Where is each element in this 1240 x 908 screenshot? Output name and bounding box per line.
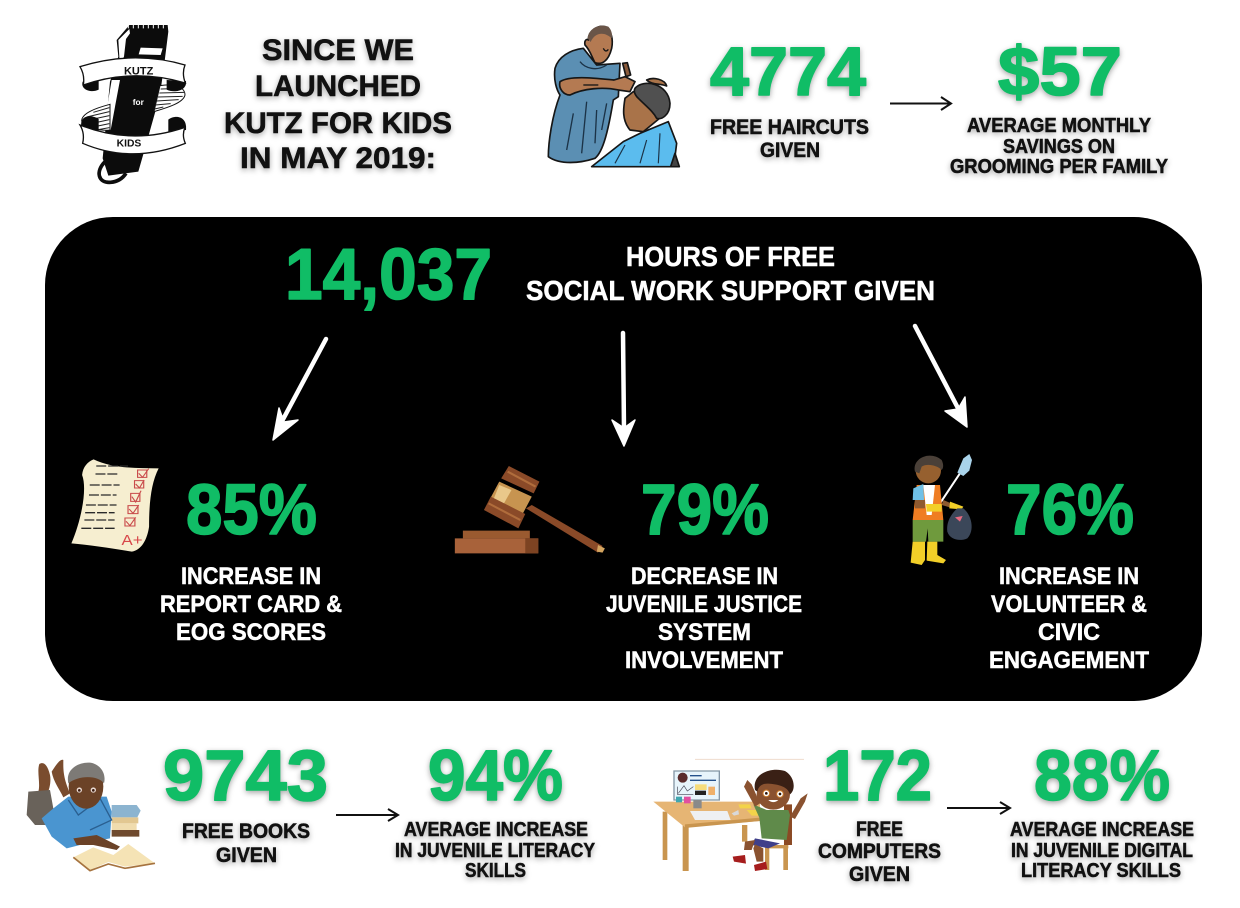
stat: 88% digital literacy: LITERACY SKILLS [1021, 860, 1181, 882]
icon: child at computer desk [653, 759, 808, 871]
label: civic result: CIVIC [1038, 619, 1100, 646]
logo: Kutz for Kids clipper: KIDS [117, 138, 141, 149]
label: report card result [160, 563, 342, 646]
arrow: to justice result [612, 333, 635, 446]
label: civic result: INCREASE IN [999, 563, 1139, 590]
title: LAUNCHED [255, 70, 421, 103]
icon: boy reading books [27, 760, 155, 871]
stat: 9743 free books: GIVEN [216, 844, 277, 867]
title [224, 34, 452, 175]
heading: hours of free social work support given: SOCIAL WORK SUPPORT GIVEN [526, 275, 935, 306]
label: justice result: INVOLVEMENT [625, 647, 783, 674]
logo: Kutz for Kids clipper: KUTZ [124, 66, 154, 78]
heading: hours of free social work support given [526, 241, 935, 306]
stat: 94% literacy: 94% [428, 737, 563, 816]
icon: child picking up litter [911, 454, 972, 565]
stat: $57 monthly savings [950, 33, 1169, 178]
stat: 94% literacy: IN JUVENILE LITERACY [395, 840, 596, 862]
title: IN MAY 2019: [240, 142, 436, 175]
stat: $57 monthly savings: SAVINGS ON [1003, 136, 1115, 158]
stat: 4774 free haircuts: FREE HAIRCUTS [710, 115, 869, 139]
heading: hours of free social work support given: HOURS OF FREE [626, 241, 835, 272]
label: justice result: JUVENILE JUSTICE [606, 591, 802, 618]
stat: 9743 free books [163, 737, 328, 867]
stat: 14,037: 14,037 [285, 235, 492, 315]
icon: report card: A+ [122, 533, 143, 549]
label: report card result: REPORT CARD & [160, 591, 342, 618]
stat: 88% digital literacy [1010, 737, 1194, 882]
stat: 4774 free haircuts [710, 33, 869, 162]
stat: 94% literacy: SKILLS [465, 860, 526, 882]
stat: 88% digital literacy: IN JUVENILE DIGITAL [1011, 840, 1193, 862]
stat: 4774 free haircuts: GIVEN [760, 138, 820, 162]
label: justice result: DECREASE IN [631, 563, 778, 590]
stat: $57 monthly savings: $57 [998, 33, 1122, 110]
label: civic result [989, 563, 1149, 674]
label: civic result: VOLUNTEER & [991, 591, 1147, 618]
stat: 85%: 85% [186, 471, 317, 550]
label: report card result: INCREASE IN [181, 563, 321, 590]
stat: 172 free computers: 172 [823, 737, 932, 816]
stat: 172 free computers [818, 737, 941, 886]
stat: 9743 free books: 9743 [163, 737, 328, 816]
stat: 88% digital literacy: 88% [1034, 737, 1170, 816]
stat: 172 free computers: GIVEN [849, 863, 910, 886]
arrow: to civic result [915, 326, 967, 427]
label: report card result: EOG SCORES [176, 619, 326, 646]
label: justice result [606, 563, 802, 674]
stat: 172 free computers: FREE [856, 818, 903, 841]
arrow: books to literacy [336, 809, 398, 821]
label: justice result: SYSTEM [658, 619, 751, 646]
arrow: to report card result [273, 339, 326, 440]
icon: report card [71, 459, 159, 552]
panel: social work support [45, 217, 1202, 701]
icon: barber cutting a boy's hair [548, 26, 679, 167]
stat: 172 free computers: COMPUTERS [818, 840, 941, 863]
stat: 94% literacy: AVERAGE INCREASE [404, 819, 588, 841]
label: civic result: ENGAGEMENT [989, 647, 1149, 674]
logo: Kutz for Kids clipper [80, 25, 186, 182]
title: SINCE WE [262, 34, 414, 67]
stat: $57 monthly savings: GROOMING PER FAMILY [950, 156, 1169, 178]
stat: 4774 free haircuts: 4774 [710, 33, 866, 110]
stat: $57 monthly savings: AVERAGE MONTHLY [967, 115, 1152, 137]
icon: gavel [455, 466, 605, 553]
logo: Kutz for Kids clipper: for [133, 97, 145, 107]
stat: 79%: 79% [641, 471, 769, 550]
title: KUTZ FOR KIDS [224, 107, 452, 140]
arrow: haircuts to savings [890, 97, 951, 110]
stat: 76%: 76% [1006, 471, 1134, 550]
stat: 9743 free books: FREE BOOKS [182, 820, 310, 843]
stat: 88% digital literacy: AVERAGE INCREASE [1010, 819, 1194, 841]
stat: 94% literacy [395, 737, 596, 882]
arrow: computers to digital literacy [947, 802, 1010, 814]
